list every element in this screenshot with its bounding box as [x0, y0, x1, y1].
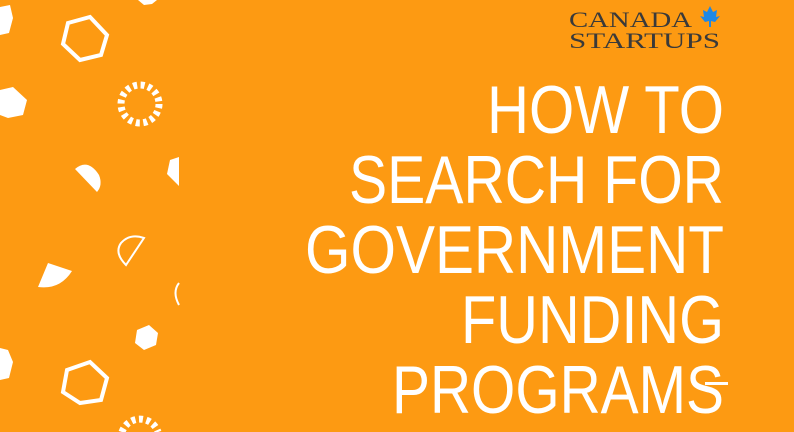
- icon: arc outline right: [176, 283, 179, 305]
- icon: wedge solid: [38, 263, 72, 287]
- icon: half circle: [75, 165, 101, 192]
- title: GOVERNMENT: [305, 212, 724, 288]
- title: HOW TO: [487, 72, 724, 148]
- title: SEARCH FOR: [349, 142, 724, 218]
- icon: partial shape right: [167, 157, 179, 186]
- icon: hexagon solid lower: [135, 325, 158, 350]
- icon: hexagon solid top left: [0, 5, 13, 35]
- logo: CANADA: [569, 7, 692, 32]
- icon: hexagon solid left: [0, 87, 27, 118]
- title: [305, 72, 724, 428]
- decorative shapes: [0, 0, 179, 432]
- icon: hexagon outline top: [63, 17, 107, 60]
- dash mark: [705, 382, 728, 385]
- icon: top shape: [138, 0, 157, 5]
- title: PROGRAMS: [392, 352, 724, 428]
- icon: maple leaf: [700, 6, 720, 27]
- icon: hexagon solid lower left: [0, 348, 13, 380]
- title: FUNDING: [461, 282, 724, 358]
- icon: half circle outline: [118, 236, 144, 265]
- icon: hexagon outline bottom: [63, 362, 107, 403]
- icon: dashed ring bottom: [122, 419, 158, 432]
- icon: dashed ring: [121, 85, 159, 123]
- logo: STARTUPS: [569, 28, 720, 53]
- logo: [569, 6, 720, 53]
